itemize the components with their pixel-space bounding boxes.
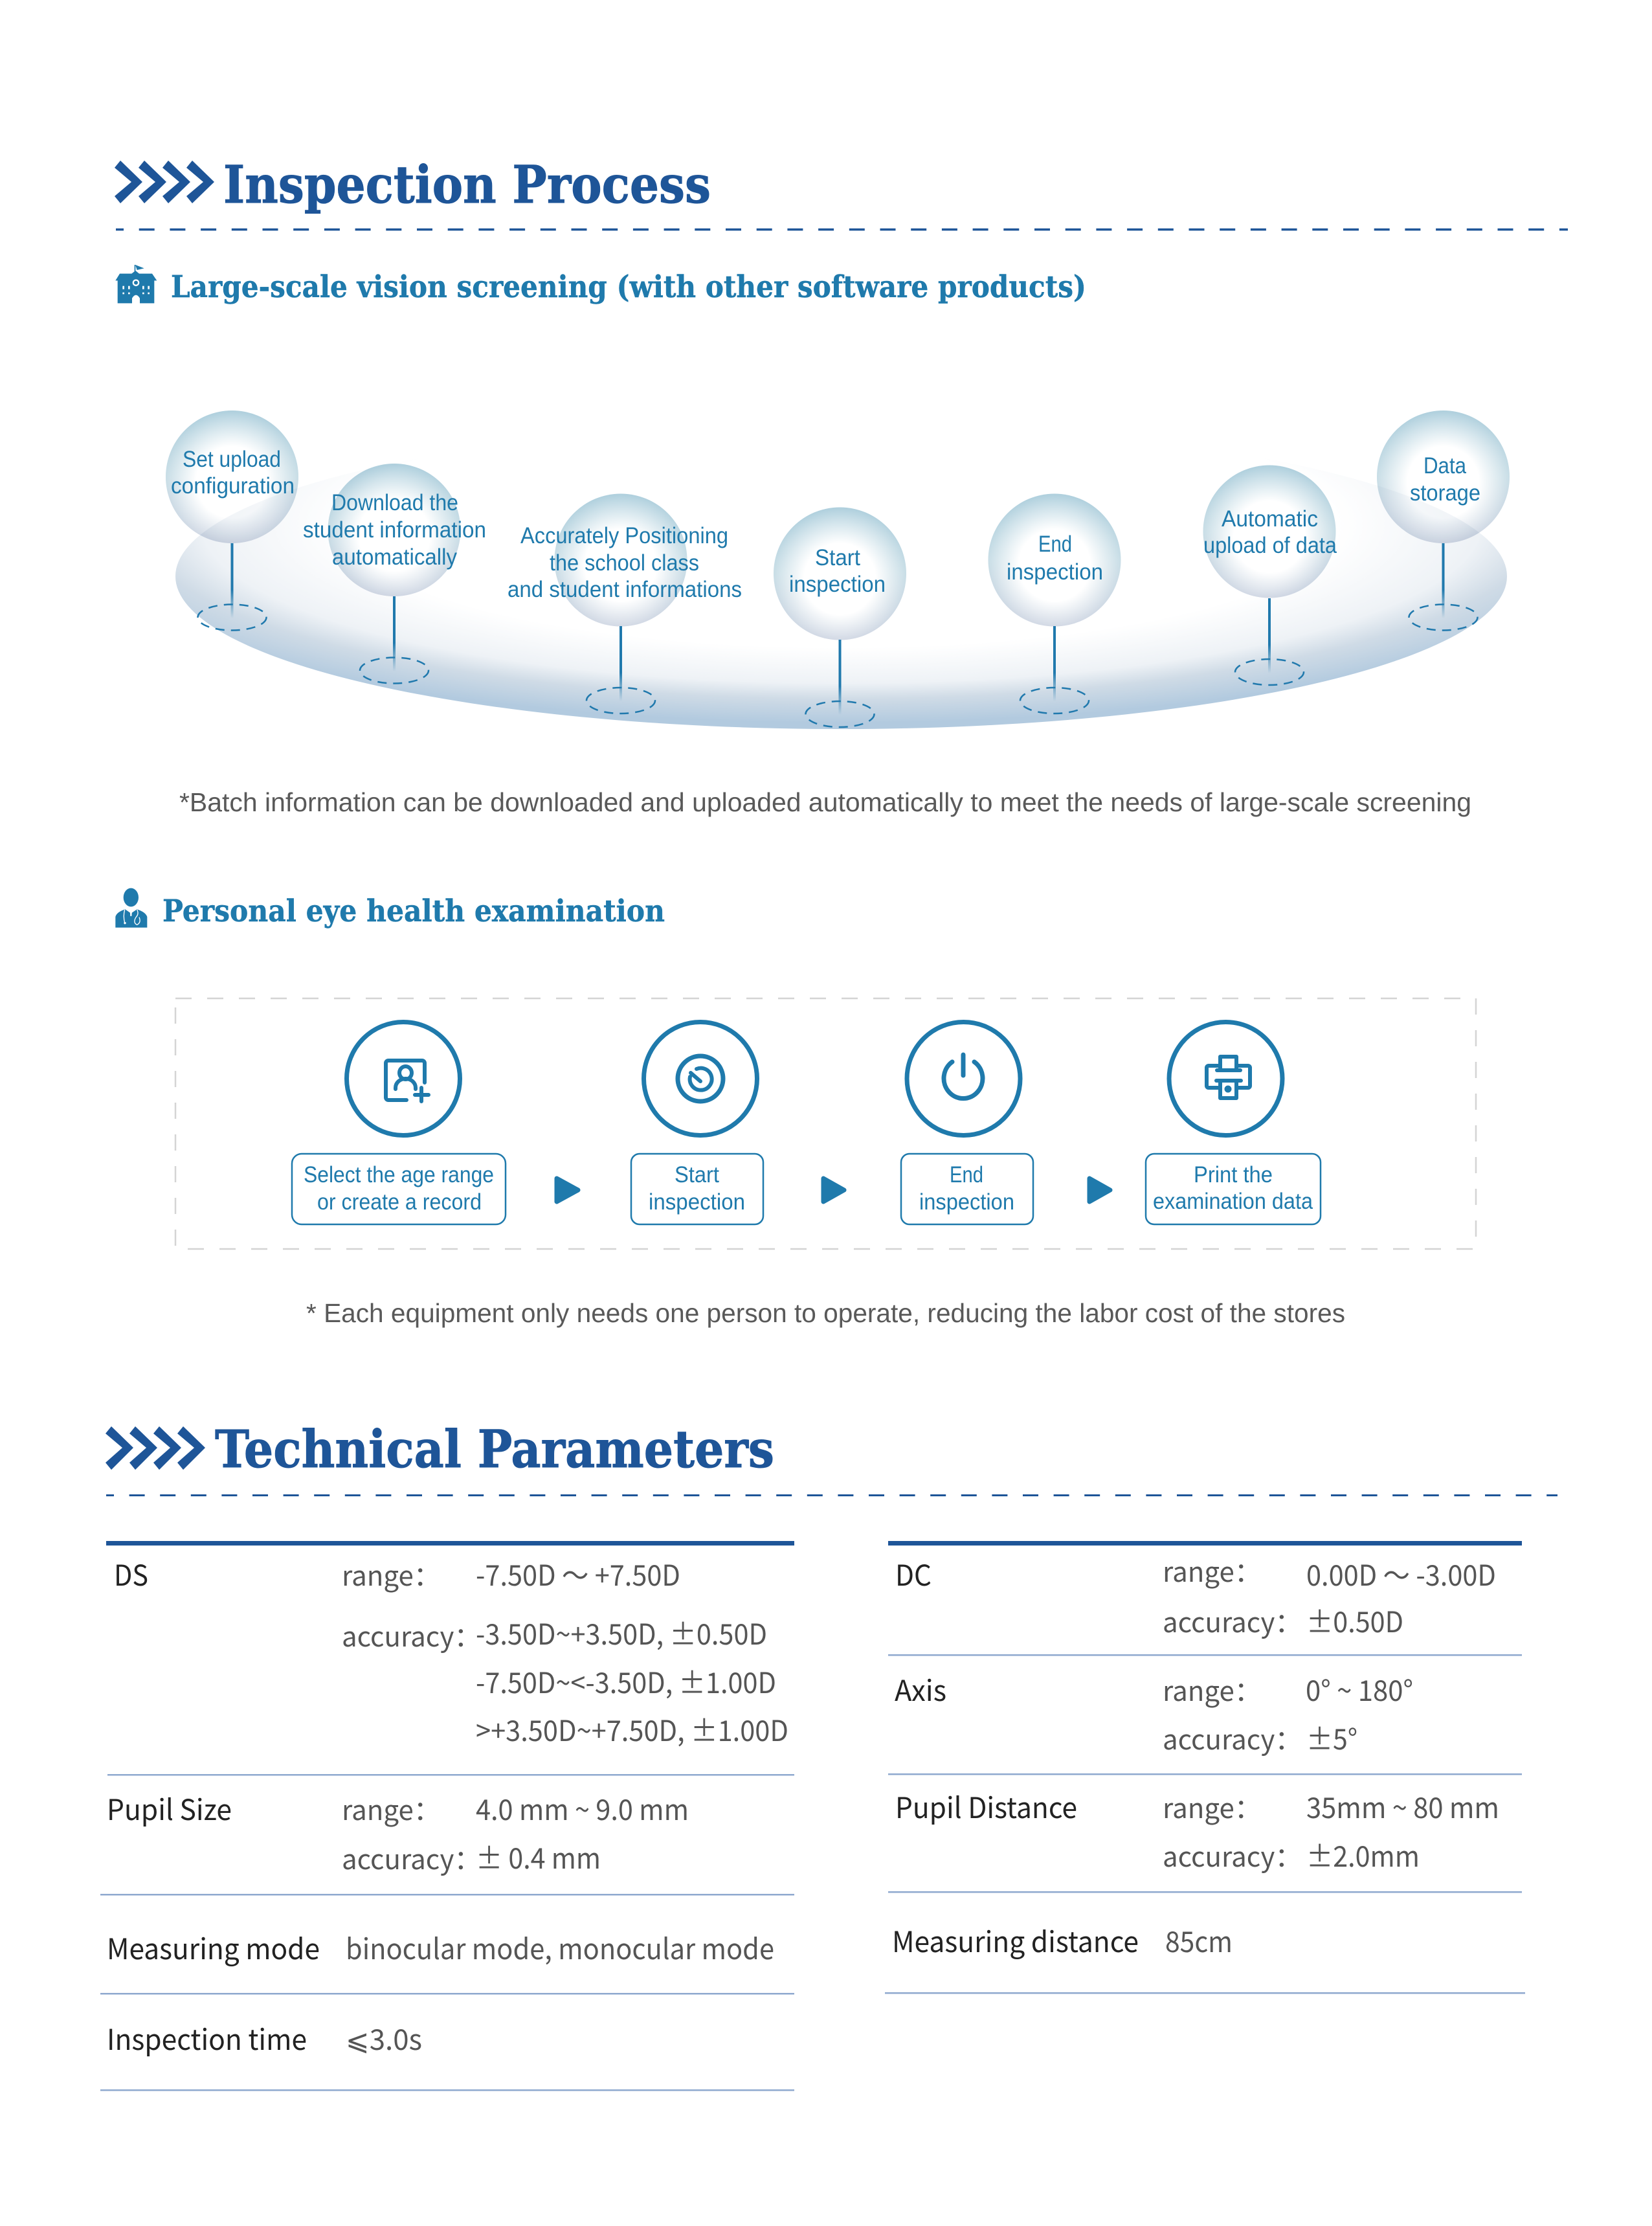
step 6: Automatic upload of data (1203, 465, 1337, 685)
icon: school building (115, 265, 157, 303)
row: Pupil Size: ± 0.4 mm (476, 1836, 601, 1877)
row: Pupil Distance: 35mm ~ 80 mm (1306, 1785, 1499, 1827)
step 1: Set upload configuration: configuration (171, 473, 295, 499)
step 1: Set upload configuration: Set upload (183, 447, 281, 472)
row: Axis: accuracy： (1163, 1718, 1302, 1758)
row: Measuring mode (107, 1926, 774, 1968)
arrow 2 (823, 1178, 844, 1202)
arrow 3 (1089, 1178, 1110, 1202)
label box (631, 1154, 763, 1224)
section heading: Technical Parameters (106, 1419, 774, 1479)
step 2: Download the student information automatically (303, 464, 486, 684)
row: DS: -3.50D~+3.50D, ±0.50D (476, 1612, 767, 1653)
note: batch information: *Batch information can be downloaded and uploaded automatically to meet the needs of large-scale screening (179, 787, 1471, 817)
step 6: Automatic upload of data: upload of data (1203, 533, 1337, 558)
step 4: Start inspection: Start (815, 545, 860, 570)
step 7: Data storage: Data (1423, 453, 1466, 478)
row: DS: >+3.50D~+7.50D, ±1.00D (476, 1708, 788, 1749)
row: Measuring distance: Measuring distance (892, 1919, 1139, 1961)
panel: personal examination flow (175, 998, 1476, 1249)
step 2: Download the student information automatically: student information (303, 517, 486, 543)
step 1: select age range (292, 1022, 506, 1224)
icon: add person (347, 1022, 460, 1136)
step 3: end inspection: End (950, 1162, 983, 1187)
row: DS: accuracy： (342, 1615, 481, 1655)
row: Axis: Axis (895, 1668, 946, 1709)
row: Pupil Distance (895, 1785, 1499, 1875)
plate ellipse (175, 423, 1507, 729)
heading text: Large-scale vision screening (with other software products) (171, 269, 1086, 305)
row: Inspection time: Inspection time (107, 2017, 307, 2058)
row: DS (114, 1553, 788, 1749)
step 4: print data (1146, 1022, 1321, 1224)
step 3: Accurately Positioning: Accurately Positioning (520, 523, 728, 548)
row: Pupil Distance: Pupil Distance (895, 1785, 1077, 1827)
section heading: Inspection Process (115, 154, 711, 215)
icon: chevrons (115, 161, 214, 203)
row: DC: 0.00D ～ -3.00D (1306, 1553, 1496, 1594)
step 3: Accurately Positioning: and student informations (508, 577, 742, 602)
row: DS: -7.50D~<-3.50D, ±1.00D (476, 1660, 776, 1702)
step 1: select age range: or create a record (317, 1189, 482, 1215)
row: Axis: ±5° (1306, 1716, 1357, 1758)
step 4: Start inspection (774, 508, 906, 727)
row: Pupil Size: 4.0 mm ~ 9.0 mm (476, 1787, 689, 1828)
step 2: Download the student information automatically: Download the (331, 490, 458, 515)
subheading: Personal eye health examination (115, 888, 665, 929)
table: left parameters (100, 1541, 794, 2091)
icon: target (643, 1022, 757, 1136)
row: Inspection time: ⩽3.0s (346, 2017, 422, 2058)
icon: doctor (115, 888, 147, 928)
step 4: Start inspection: inspection (789, 572, 886, 597)
row: Measuring mode: binocular mode, monocular mode (346, 1926, 774, 1968)
row: Pupil Size: Pupil Size (107, 1787, 232, 1828)
step 3: end inspection: inspection (919, 1189, 1014, 1215)
row: Axis: range： (1163, 1670, 1262, 1709)
row: DS: range： (342, 1555, 441, 1594)
row: DC: DC (895, 1553, 932, 1594)
row: Pupil Size: accuracy： (342, 1838, 481, 1878)
step 1: select age range: Select the age range (304, 1162, 494, 1187)
row: DS: DS (114, 1553, 148, 1594)
heading text: Personal eye health examination (162, 894, 665, 929)
row: DC: range： (1163, 1551, 1262, 1590)
arrow 1 (557, 1178, 578, 1202)
step 5: End inspection: inspection (1007, 559, 1103, 585)
step 5: End inspection (988, 493, 1121, 714)
step 3: Accurately Positioning: the school class (550, 550, 699, 576)
row: Pupil Size (107, 1787, 689, 1878)
step 1: Set upload configuration (166, 410, 298, 631)
step 2: start inspection: Start (675, 1162, 719, 1187)
step 4: print data: Print the (1194, 1162, 1273, 1187)
step 5: End inspection: End (1038, 532, 1072, 557)
step 6: Automatic upload of data: Automatic (1222, 506, 1318, 532)
diagram: screening plate with seven steps (166, 410, 1510, 729)
title: Technical Parameters: Technical Parameters (215, 1419, 774, 1479)
row: Measuring distance: 85cm (1165, 1919, 1233, 1961)
row: DC: accuracy： (1163, 1601, 1302, 1641)
row: Pupil Size: range： (342, 1789, 441, 1828)
row: Pupil Distance: range： (1163, 1787, 1262, 1827)
label box (292, 1154, 506, 1224)
step 3: end inspection (901, 1022, 1033, 1224)
label box (901, 1154, 1033, 1224)
table: right parameters (885, 1541, 1525, 1994)
step 4: print data: examination data (1153, 1189, 1313, 1214)
icon: printer (1169, 1022, 1282, 1136)
row: Axis (895, 1668, 1413, 1758)
row: DS: -7.50D ～ +7.50D (476, 1553, 680, 1594)
title: Inspection Process: Inspection Process (223, 154, 711, 215)
row: Axis: 0° ~ 180° (1306, 1668, 1413, 1709)
step 7: Data storage: storage (1410, 480, 1480, 506)
row: DC: ±0.50D (1306, 1599, 1403, 1641)
step 2: Download the student information automatically: automatically (332, 545, 457, 570)
row: Measuring mode: Measuring mode (107, 1926, 320, 1968)
row: Pupil Distance: ±2.0mm (1306, 1834, 1420, 1875)
icon: chevrons (106, 1426, 205, 1470)
step 2: start inspection: inspection (649, 1189, 745, 1215)
note: one person to operate: * Each equipment only needs one person to operate, reducing the labor cost of the stores (306, 1298, 1345, 1328)
step 3: Accurately Positioning (508, 493, 742, 714)
step 2: start inspection (631, 1022, 763, 1224)
subheading: Large-scale vision screening (115, 265, 1086, 305)
row: DC (895, 1551, 1496, 1641)
row: Pupil Distance: accuracy： (1163, 1836, 1302, 1875)
step 7: Data storage (1377, 410, 1510, 631)
icon: power (907, 1022, 1020, 1136)
label box (1146, 1154, 1321, 1224)
row: Inspection time (107, 2017, 422, 2058)
